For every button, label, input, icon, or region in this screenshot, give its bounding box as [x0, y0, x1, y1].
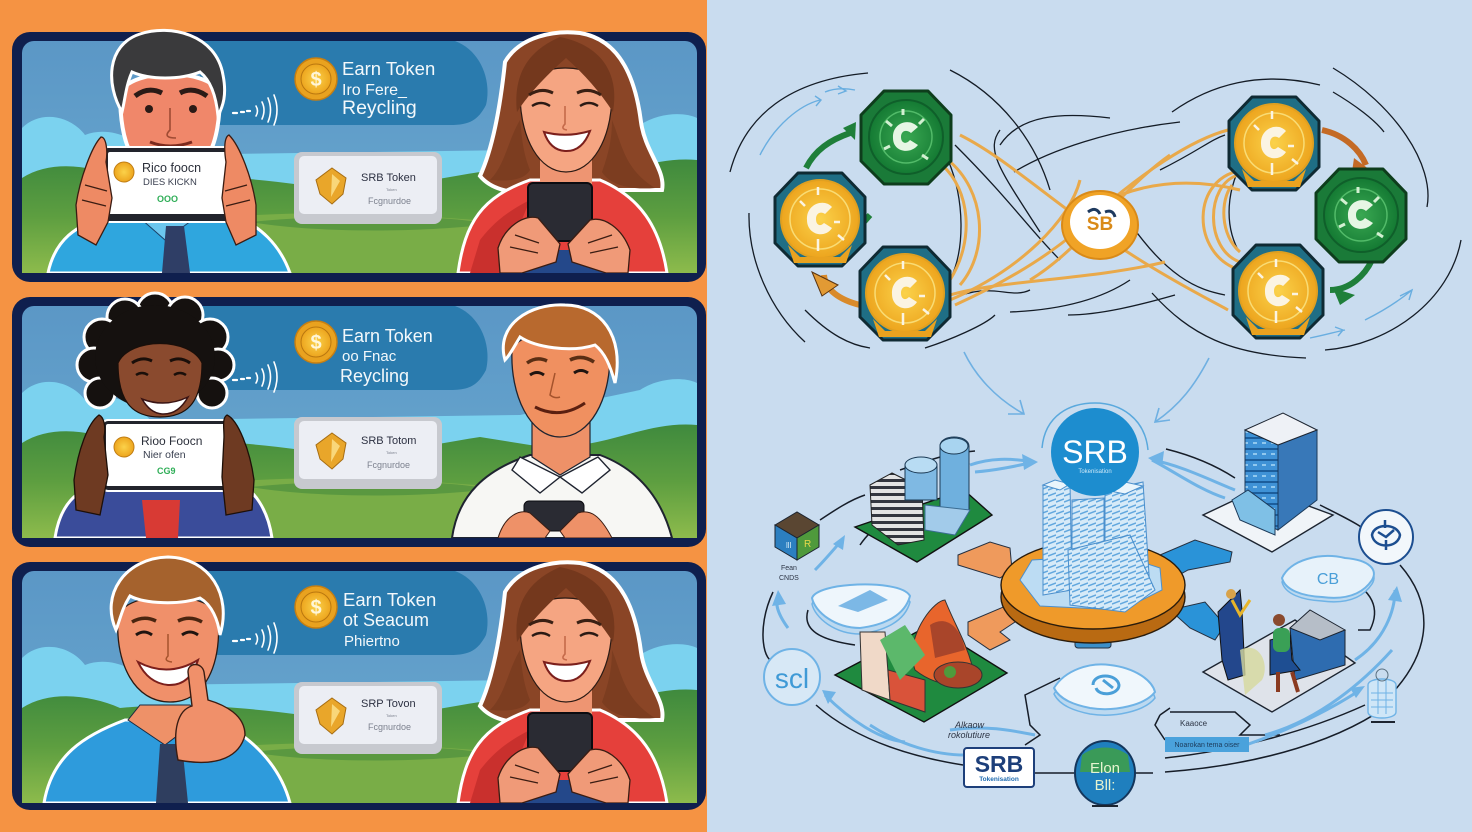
panel 2 tablet: CG9 — [157, 466, 176, 476]
SRB blue circle: SRB — [1062, 434, 1128, 470]
panel 1 signal waves — [233, 95, 277, 125]
SCI circle badge — [764, 649, 820, 705]
arrow heads — [812, 122, 1370, 305]
globe badge: Bll: — [1095, 777, 1115, 794]
blue label bar: Noarokan tema oiser — [1175, 742, 1240, 749]
token: gold left — [775, 173, 865, 266]
panel 2 signal waves — [233, 362, 277, 392]
panel 1 tablet: Rico foocn — [142, 161, 201, 175]
panel 3 heading: Phiertno — [344, 633, 400, 650]
panel 1 scene — [22, 41, 697, 273]
panel 2 person: man with phone — [452, 305, 672, 538]
infinity token loop diagram — [730, 68, 1461, 358]
hub: blue and orange arms — [958, 540, 1232, 650]
panel 2 heading: Reycling — [340, 366, 409, 386]
cube caption: Fean — [781, 565, 797, 572]
orange flow curves — [942, 130, 1245, 310]
globe badge — [1075, 741, 1135, 807]
SRB label box — [964, 748, 1034, 787]
panel 2 scene — [22, 306, 697, 538]
emblem circle — [1359, 510, 1413, 564]
SCI circle badge: scl — [775, 663, 809, 694]
panel 2 token card: Token — [386, 450, 397, 455]
panel 3 coin — [295, 586, 337, 628]
globe badge: Elon — [1090, 760, 1120, 777]
cloud: top right — [1282, 556, 1374, 602]
panel 2 tablet: Rioo Foocn — [141, 434, 202, 448]
central SRB coin — [1062, 191, 1138, 259]
panel 1 coin — [295, 58, 337, 100]
token: gold top right — [1229, 97, 1319, 190]
panel 3 heading: Earn Token — [343, 589, 436, 610]
token: gold bottom right — [1233, 245, 1323, 338]
panel 1 heading: Reycling — [342, 97, 417, 119]
panel 1 hands — [76, 135, 256, 245]
cube caption: CNDS — [779, 575, 799, 582]
SRB blue circle — [1042, 403, 1148, 496]
panel 1 token card: SRB Token — [361, 172, 416, 184]
panel 2 heading: Earn Token — [342, 326, 433, 346]
cloud: bottom centre — [1054, 664, 1155, 715]
small cube icon — [775, 512, 819, 560]
panel 3 token card: Fcgnurdoe — [368, 722, 411, 732]
panel 1 frame — [12, 32, 706, 282]
panel 3 frame — [12, 562, 706, 810]
panel 2 token card: SRB Totom — [361, 435, 416, 447]
panel 3 token card: Token — [386, 713, 397, 718]
SRB label box: SRB — [975, 751, 1023, 777]
panel 3 token card — [294, 682, 442, 754]
blue label bar — [1165, 737, 1249, 752]
small cube icon: R — [804, 539, 811, 550]
panel 2 token card — [294, 417, 442, 489]
cloud: top right: CB — [1317, 571, 1339, 588]
panel 3: man pointing and woman with phone — [12, 557, 706, 810]
panel 3 person: woman — [458, 562, 667, 803]
panel 1 token card: Fcgnurdoe — [368, 196, 411, 206]
platform: recycling green base — [835, 600, 1007, 722]
panel 2 token card: Fcgnurdoe — [367, 460, 410, 470]
light blue arrows from loop to SRB network — [964, 352, 1209, 422]
panel 3 signal waves — [233, 623, 277, 653]
panel 1: man with tablet and woman with phone — [12, 30, 706, 282]
database cylinder icon — [1368, 669, 1396, 723]
token: green top left — [861, 91, 951, 184]
outer black sketch arcs — [730, 68, 1461, 358]
panel 1 tablet — [102, 147, 234, 222]
hub: blue towers — [1020, 480, 1162, 612]
panel 1 tablet: DIES KICKN — [143, 177, 197, 188]
caption: bottom right: Kaaoce — [1180, 719, 1208, 728]
green and orange link arrows — [806, 130, 1372, 305]
small cube icon: lll — [786, 541, 792, 550]
panel 3 person: man pointing — [44, 557, 290, 803]
panel 2 tablet — [102, 420, 230, 491]
panel 2: woman with tablet and man with phone — [12, 293, 706, 547]
token: green right — [1316, 169, 1406, 262]
panel 1 heading: Earn Token — [342, 58, 435, 79]
token: gold bottom left — [860, 247, 950, 340]
background: blue right half — [707, 0, 1472, 832]
SRB network ecosystem diagram — [763, 403, 1424, 807]
panel 2 frame — [12, 297, 706, 547]
platform: blue office building — [1203, 413, 1333, 552]
central SRB coin: SB — [1087, 214, 1113, 235]
hub: orange disk — [1001, 541, 1185, 643]
panel 3 token card: SRP Tovon — [361, 698, 416, 710]
SRB label box: Tokenisation — [979, 776, 1019, 783]
caption: bottom left: Alkaow — [954, 720, 985, 730]
background: orange left half — [0, 0, 707, 832]
platform: workers at machine — [1203, 589, 1355, 712]
panel 2 coin — [295, 321, 337, 363]
panel 2 heading: oo Fnac — [342, 348, 397, 365]
arrow heads for flows — [772, 451, 1402, 704]
cloud: mid left — [812, 584, 910, 634]
caption: bottom left: rokolutiure — [948, 730, 990, 740]
panel 2 hands — [74, 415, 254, 515]
panel 2 tablet: Nier ofen — [143, 449, 186, 461]
panel 1 tablet: OOO — [157, 194, 178, 204]
panel 1 heading: Iro Fere_ — [342, 82, 408, 99]
panel 1 person: man — [48, 30, 290, 273]
platform: factory on green base — [855, 437, 992, 562]
light blue sketch arrows — [760, 86, 1412, 338]
light blue flow arrows — [777, 459, 1395, 755]
panel 3 heading: ot Seacum — [343, 610, 429, 630]
panel 2 person: woman with afro — [55, 293, 272, 538]
panel 3 scene — [22, 571, 697, 803]
SRB blue circle: Tokenisation — [1078, 469, 1112, 475]
panel 1 token card — [294, 152, 442, 224]
panel 1 token card: Token — [386, 187, 397, 192]
panel 1 person: woman — [458, 32, 667, 273]
outer black ring segments — [763, 449, 1424, 773]
